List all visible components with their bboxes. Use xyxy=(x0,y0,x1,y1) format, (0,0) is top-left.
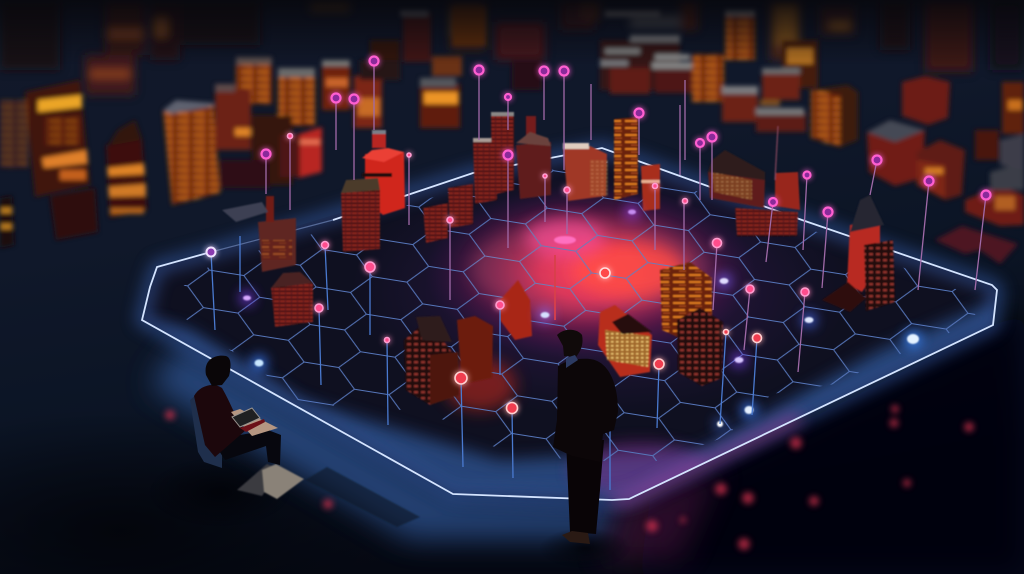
distant city xyxy=(0,0,1024,264)
glowing platform outline xyxy=(142,148,997,500)
desk xyxy=(231,409,278,436)
darkened far edge of the scene xyxy=(0,0,1024,64)
platform surface xyxy=(142,148,997,500)
mid-left block cluster xyxy=(215,6,486,188)
spot halos xyxy=(240,205,922,429)
buildings right group xyxy=(708,126,895,312)
left lit tower xyxy=(0,80,98,248)
top row dark towers xyxy=(0,0,1024,95)
signal pin heads xyxy=(206,56,990,414)
centre back white-roofed blocks xyxy=(512,10,818,102)
chair xyxy=(190,395,222,468)
lit floor band outside the platform xyxy=(0,310,1024,574)
bright orange tower xyxy=(106,100,220,218)
legs xyxy=(566,440,604,534)
torso xyxy=(194,385,246,457)
tablet xyxy=(232,408,260,427)
collar xyxy=(566,355,578,368)
head xyxy=(557,330,583,357)
floor light spots xyxy=(240,205,922,429)
buildings centre row xyxy=(473,112,660,211)
seated person at desk xyxy=(150,356,304,526)
buildings front group xyxy=(404,262,723,405)
jacket xyxy=(553,359,618,462)
standing man xyxy=(540,330,630,568)
right back blocks xyxy=(722,68,1024,226)
red floor panels xyxy=(935,226,1018,264)
reflected light patch xyxy=(237,464,304,499)
spot cores xyxy=(243,210,919,427)
signal pin stems xyxy=(211,61,986,490)
arm xyxy=(240,419,265,432)
head xyxy=(206,356,231,386)
legs xyxy=(212,430,281,465)
shoes xyxy=(562,531,590,544)
hexagon network grid xyxy=(184,162,976,461)
foreground model buildings xyxy=(222,112,895,405)
floor reflection dots xyxy=(165,405,974,550)
buildings left group xyxy=(222,130,473,327)
